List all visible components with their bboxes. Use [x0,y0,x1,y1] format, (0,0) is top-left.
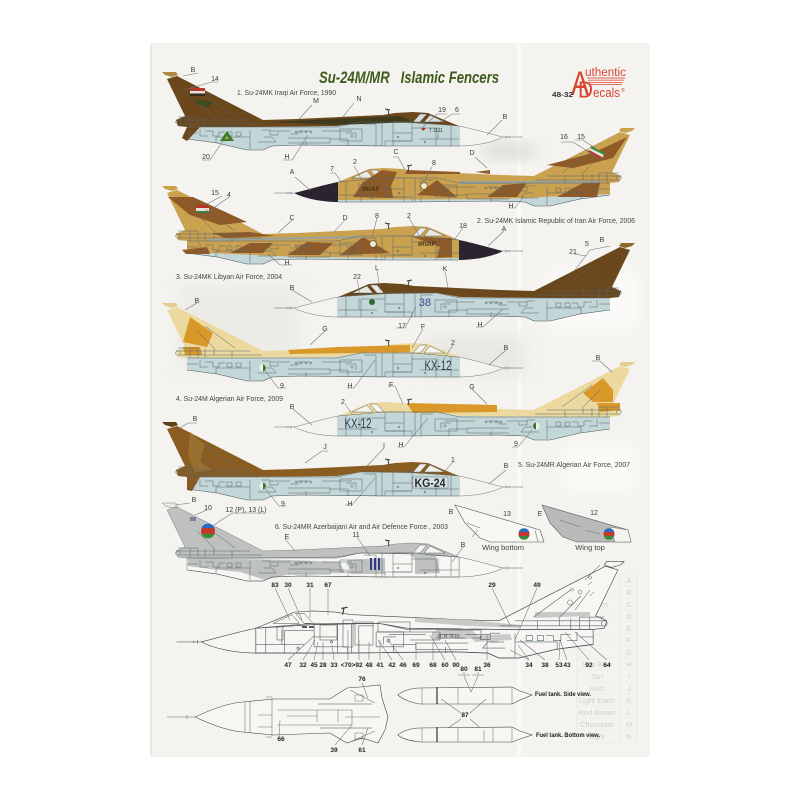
callout numbers: 60 [441,662,449,669]
logo: Authentic Decals: ecals [593,86,620,100]
wing top view [538,505,631,552]
aircraft 2: Iranian Su-24MK: IRIAF [362,187,380,193]
colour legend table: K [626,696,632,705]
labels: 15 [577,134,585,141]
labels: 15 [211,190,219,197]
logo: Authentic Decals: uthentic [585,67,626,79]
labels: A [502,226,507,233]
wing bottom view: B [449,509,454,516]
colour legend table: Desert [586,600,609,609]
colour legend table: Red Brown [578,708,616,717]
aircraft 6: Algerian Su-24MR, KX-12: KX-12 [344,415,372,431]
callout numbers: 30 [284,582,292,589]
labels: H [284,260,290,267]
labels: 2 [341,399,345,406]
labels: M [313,98,319,105]
aircraft 2: Iranian Su-24MK [274,128,635,225]
labels: 18 [459,223,467,230]
labels: 2 [353,159,357,166]
labels: G [469,384,475,391]
labels: D [342,215,348,222]
labels: 7 [330,166,334,173]
aircraft 2: Iranian Su-24MK: 2. Su-24MK Islamic Republic of Iran Air Force, 2006 [477,216,635,225]
callout numbers: 45 [310,662,318,669]
labels: N [356,96,362,103]
fuel tank: bottom view: Fuel tank. Bottom view. [536,732,600,739]
aircraft 4: Su-24MK with number 38 [274,237,635,330]
labels: H [347,383,353,390]
callout numbers: 92 [585,662,593,669]
colour legend table: F [627,636,632,645]
callout numbers: <70> [341,662,356,669]
labels: B [192,497,197,504]
callout numbers: 46 [399,662,407,669]
labels: 21 [569,249,577,256]
colour legend table: H [626,660,632,669]
wing top view: Wing top [575,543,605,552]
labels: 2 [451,340,455,347]
aircraft 7: Algerian Su-24M, KG-24: KG-24 [414,478,446,490]
colour legend table: B [626,588,632,597]
labels: B [503,114,508,121]
labels: 19 [438,107,446,114]
aircraft 3: Libyan Su-24MK [162,186,523,281]
labels [290,134,598,210]
labels: 9 [281,501,285,508]
labels: J [323,444,327,451]
fuel tank: bottom view [398,727,600,742]
labels: G [322,326,328,333]
fuel tank: side view: 80 [460,666,468,673]
aircraft 5: Algerian Su-24M, KX-12 [162,298,523,403]
labels: H [477,322,483,329]
colour legend table: Sea Blue [582,660,612,669]
wing bottom view: Wing bottom [482,543,524,552]
callout numbers: 48 [365,662,373,669]
labels: 12 (P), 13 (L) [225,507,267,514]
callout numbers: 90 [452,662,460,669]
colour legend table: White [587,588,607,597]
fuel tank: side view: Fuel tank. Side view. [535,691,591,698]
callout numbers: 29 [488,582,496,589]
callout numbers: 69 [412,662,420,669]
labels: B [191,67,196,74]
stencil callout 87: 87 [461,712,469,719]
aircraft 7: Algerian Su-24M, KG-24 [162,416,523,508]
colour legend table [577,574,637,743]
colour legend table: N [626,732,632,741]
labels: 20 [202,154,210,161]
colour legend table: L [627,708,631,717]
labels: H [284,154,290,161]
colour legend table: M [626,720,632,729]
callout numbers: 43 [563,662,571,669]
colour legend table: D [626,612,632,621]
labels: 14 [211,76,219,83]
fuel tank: side view: 81 [474,666,482,673]
callout numbers: 36 [483,662,491,669]
callout numbers: 28 [319,662,327,669]
labels: I [383,443,385,450]
colour legend table: A [626,576,632,585]
paper sheet background [150,43,650,757]
labels: H [398,442,404,449]
colour legend table: Tan [591,672,603,681]
labels [185,298,509,390]
fuel tank: side view [398,666,591,704]
aircraft 5: Algerian Su-24M, KX-12: KX-12 [424,357,452,373]
callout numbers: 83 [271,582,279,589]
callout numbers: 64 [603,662,611,669]
labels: B [600,237,605,244]
aircraft 1: Iraqi Su-24MK: 1. Su-24MK Iraqi Air Force, 1990 [237,88,336,97]
labels: 4 [227,192,231,199]
colour legend table: Chocolate [580,720,614,729]
logo: Authentic Decals [552,65,626,103]
line drawing: side view with stencil placement [176,561,624,669]
wing top view: E [538,511,543,518]
callout numbers: 32 [299,662,307,669]
line drawing: top view [167,676,388,754]
labels [180,416,509,508]
callout numbers: 34 [525,662,533,669]
logo: Authentic Decals: A [571,65,589,103]
labels: 8 [432,160,436,167]
wing bottom view: 13 [503,511,511,518]
callout numbers: 42 [388,662,396,669]
labels: K [443,266,448,273]
labels: B [193,416,198,423]
labels [183,67,508,161]
colour legend table: G [626,648,632,657]
aircraft 3: Libyan Su-24MK: 3. Su-24MK Libyan Air Force, 2004 [176,272,282,281]
labels: E [285,534,290,541]
labels: 9 [280,383,284,390]
labels: 9 [514,441,518,448]
labels [290,355,612,449]
labels: A [290,169,295,176]
callout numbers: 49 [533,582,541,589]
line drawing: top view: 76 [358,676,366,683]
labels: 17 [398,323,406,330]
callout numbers: 31 [306,582,314,589]
callout numbers: 68 [429,662,437,669]
colour legend table: Light [589,732,606,741]
callout numbers: 38 [541,662,549,669]
labels: C [289,215,295,222]
aircraft 4: Su-24MK with number 38: 38 [419,297,431,309]
labels: B [596,355,601,362]
labels: 8 [375,213,379,220]
aircraft 8: Azerbaijani Su-24MR: 6. Su-24MR Azerbaijani Air and Air Defence Force , 2003 [275,522,448,531]
colour legend table: J [627,684,631,693]
labels: 5 [585,241,589,248]
callout numbers: 33 [330,662,338,669]
labels: B [195,298,200,305]
labels [290,237,610,330]
line drawing: top view: 66 [277,736,285,743]
colour legend table: I [628,672,630,681]
labels: H [347,501,353,508]
labels: 2 [407,213,411,220]
line drawing: top view: 61 [358,747,366,754]
callout numbers: 47 [284,662,292,669]
line drawing: top view: 39 [330,747,338,754]
wing bottom view [449,505,544,552]
labels: H [508,203,514,210]
labels: B [290,285,295,292]
labels: B [461,542,466,549]
colour legend table: E [626,624,632,633]
callout numbers: 53 [555,662,563,669]
stencil callout 87 [441,699,486,733]
labels: 1 [451,457,455,464]
labels: F [421,324,425,331]
labels [175,497,466,562]
labels: 11 [352,532,360,539]
colour legend table: Light Earth [579,696,615,705]
labels: F [389,382,393,389]
colour legend table: C [626,600,632,609]
aircraft 3: Libyan Su-24MK: IRIAF [418,242,436,248]
aircraft 1: Iraqi Su-24MK: T.1111 [429,128,443,134]
logo: Authentic Decals: D [578,76,593,102]
aircraft 6: Algerian Su-24MR, KX-12: 5. Su-24MR Algerian Air Force, 2007 [518,460,630,469]
labels: D [469,150,475,157]
labels: 6 [455,107,459,114]
labels: B [290,404,295,411]
wing top view: 12 [590,510,598,517]
logo: Authentic Decals: ® [621,87,625,94]
aircraft 8: Azerbaijani Su-24MR [162,497,523,581]
callout numbers: 41 [376,662,384,669]
labels [205,190,507,267]
callout numbers: 67 [324,582,332,589]
labels: 16 [560,134,568,141]
labels: B [504,345,509,352]
colour legend table: Rust [589,684,606,693]
labels: C [393,149,399,156]
aircraft 5: Algerian Su-24M, KX-12: 4. Su-24M Algerian Air Force, 2009 [176,394,283,403]
labels: L [375,265,379,272]
aircraft 1: Iraqi Su-24MK [162,67,523,161]
labels: 22 [353,274,361,281]
labels: 10 [204,505,212,512]
title: Su-24M/MR Islamic Fencers [319,68,499,87]
labels: B [504,463,509,470]
callout numbers: 92 [355,662,363,669]
callout numbers [271,582,611,669]
logo: Authentic Decals: 48-32 [552,90,573,99]
aircraft 6: Algerian Su-24MR, KX-12 [274,355,635,469]
